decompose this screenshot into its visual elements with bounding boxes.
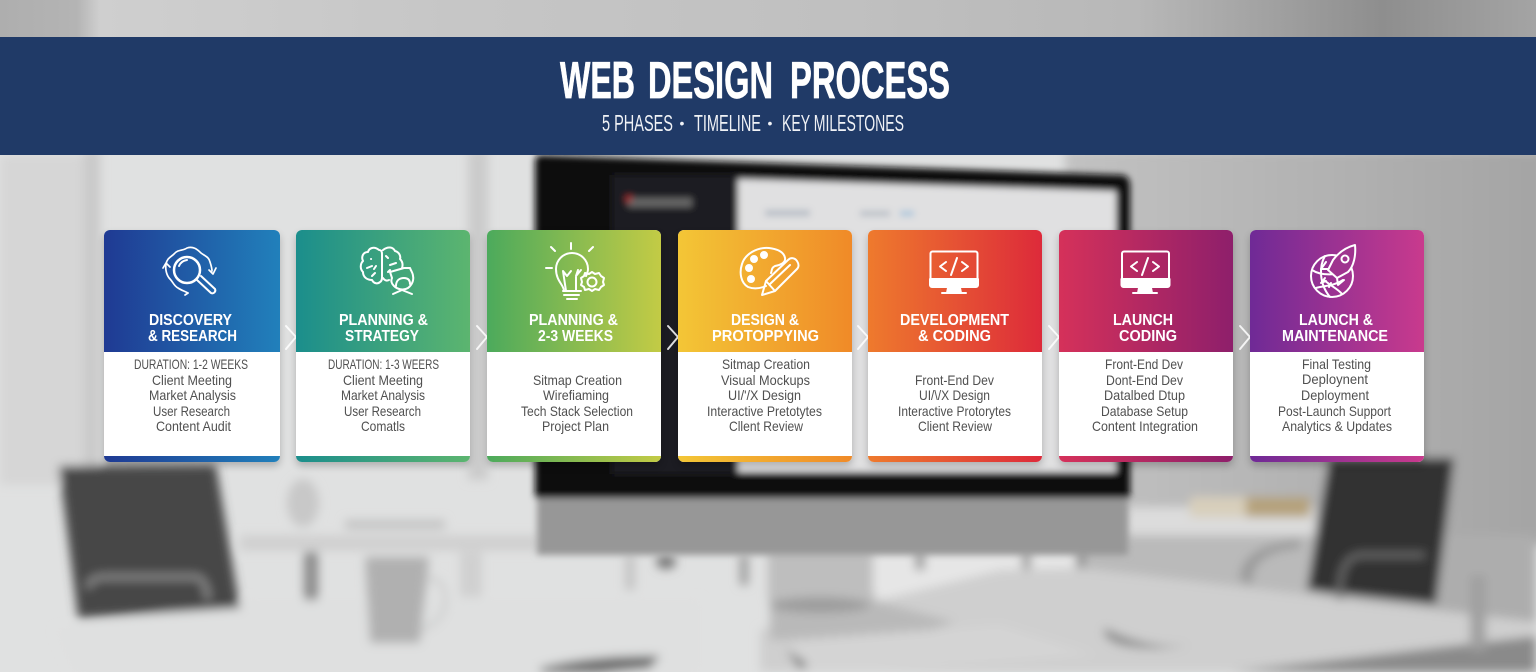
text block: Final Testing bbox=[1302, 356, 1371, 372]
text block: Project Plan bbox=[542, 418, 609, 434]
text block: Visual Mockups bbox=[721, 372, 810, 388]
arrow bbox=[477, 326, 487, 349]
heading: 2-3 WEEKS bbox=[538, 328, 613, 345]
title: DESIGN bbox=[648, 52, 773, 110]
panel: development & coding bbox=[868, 230, 1042, 462]
heading: PLANNING & bbox=[339, 312, 428, 329]
text block: Front-End Dev bbox=[1105, 356, 1183, 372]
text block: Interactive Pretotytes bbox=[707, 403, 822, 419]
arrow bbox=[668, 326, 678, 349]
panel: launch coding bbox=[1059, 230, 1233, 462]
text block: Client Meeting bbox=[343, 372, 423, 388]
text block: UI/'/X Design bbox=[728, 387, 801, 403]
heading: MAINTENANCE bbox=[1282, 328, 1388, 345]
panel: planning & strategy bbox=[296, 230, 470, 462]
icon: monitor with code bbox=[1122, 252, 1170, 293]
icon: brain and document bbox=[361, 247, 413, 294]
text block: Wirefiaming bbox=[543, 387, 609, 403]
heading: STRATEGY bbox=[345, 328, 419, 345]
text block: User Research bbox=[344, 403, 421, 419]
text block bbox=[1092, 356, 1198, 434]
text block bbox=[134, 356, 248, 434]
text block: Datalbed Dtup bbox=[1104, 387, 1185, 403]
text block: Client Review bbox=[918, 418, 993, 434]
text block bbox=[898, 372, 1011, 434]
heading: DESIGN & bbox=[731, 312, 799, 329]
text block: Sitmap Creation bbox=[722, 356, 810, 372]
text block bbox=[328, 356, 439, 434]
arrow bbox=[286, 326, 296, 349]
text block bbox=[707, 356, 822, 434]
arrow bbox=[858, 326, 868, 349]
text block: Interactive Protorytes bbox=[898, 403, 1011, 419]
heading bbox=[339, 312, 428, 345]
arrow bbox=[1049, 326, 1059, 349]
icon: monitor with code bbox=[930, 252, 978, 293]
heading bbox=[712, 312, 819, 345]
subtitle: TIMELINE bbox=[694, 110, 761, 136]
text block: Content Integration bbox=[1092, 418, 1198, 434]
text block: Post-Launch Support bbox=[1278, 403, 1391, 419]
heading bbox=[529, 312, 618, 345]
text block bbox=[1278, 356, 1392, 434]
panel: launch & maintenance bbox=[1250, 230, 1424, 462]
subtitle: • bbox=[768, 115, 772, 131]
icon: light bulb and gear bbox=[546, 243, 604, 299]
heading bbox=[1282, 312, 1388, 345]
text block: Dont-End Dev bbox=[1106, 372, 1183, 388]
heading: CODING bbox=[1119, 328, 1177, 345]
text block: Database Setup bbox=[1101, 403, 1188, 419]
text block: UI/\/X Design bbox=[919, 387, 990, 403]
icon: magnifier with cycle arrows bbox=[163, 247, 216, 295]
heading: & RESEARCH bbox=[148, 328, 237, 345]
subtitle: KEY MILESTONES bbox=[782, 110, 904, 136]
heading: LAUNCH bbox=[1113, 312, 1173, 329]
text block: DURATION: 1-2 WEEKS bbox=[134, 356, 248, 372]
heading: DEVELOPMENT bbox=[900, 312, 1009, 329]
title: WEB bbox=[560, 52, 635, 110]
subtitle bbox=[602, 110, 904, 136]
heading: PROTOPPYING bbox=[712, 328, 819, 345]
text block: Tech Stack Selection bbox=[521, 403, 633, 419]
heading bbox=[148, 312, 237, 345]
title: PROCESS bbox=[790, 52, 950, 110]
arrow bbox=[1240, 326, 1250, 349]
header banner bbox=[0, 37, 1536, 155]
heading: & CODING bbox=[918, 328, 991, 345]
heading: LAUNCH & bbox=[1299, 312, 1373, 329]
text block: Market Analysis bbox=[149, 387, 236, 403]
panel: planning & weeks bbox=[487, 230, 661, 462]
text block: User Research bbox=[153, 403, 230, 419]
text block: Comatls bbox=[361, 418, 405, 434]
text block: Cllent Review bbox=[729, 418, 804, 434]
heading: PLANNING & bbox=[529, 312, 618, 329]
heading bbox=[900, 312, 1009, 345]
text block bbox=[521, 372, 633, 434]
text block: DURATION: 1-3 WEERS bbox=[328, 356, 439, 372]
title bbox=[560, 52, 950, 110]
text block: Content Audit bbox=[156, 418, 231, 434]
card shadows bbox=[104, 234, 1424, 466]
icon: rocket and globe bbox=[1311, 245, 1355, 297]
text block: Sitmap Creation bbox=[533, 372, 622, 388]
text block: Front-End Dev bbox=[915, 372, 994, 388]
text block: Client Meeting bbox=[152, 372, 232, 388]
heading: DISCOVERY bbox=[149, 312, 232, 329]
text block: Market Analysis bbox=[341, 387, 425, 403]
text block: Deployment bbox=[1301, 387, 1369, 403]
subtitle: 5 PHASES bbox=[602, 110, 673, 136]
panel: discovery & research bbox=[104, 230, 280, 462]
text block: Analytics & Updates bbox=[1282, 418, 1392, 434]
subtitle: • bbox=[680, 115, 684, 131]
panel: design & prototyping bbox=[678, 230, 852, 462]
heading bbox=[1113, 312, 1177, 345]
text block: Deploynent bbox=[1302, 371, 1368, 387]
icon: palette and pencil bbox=[741, 248, 798, 295]
